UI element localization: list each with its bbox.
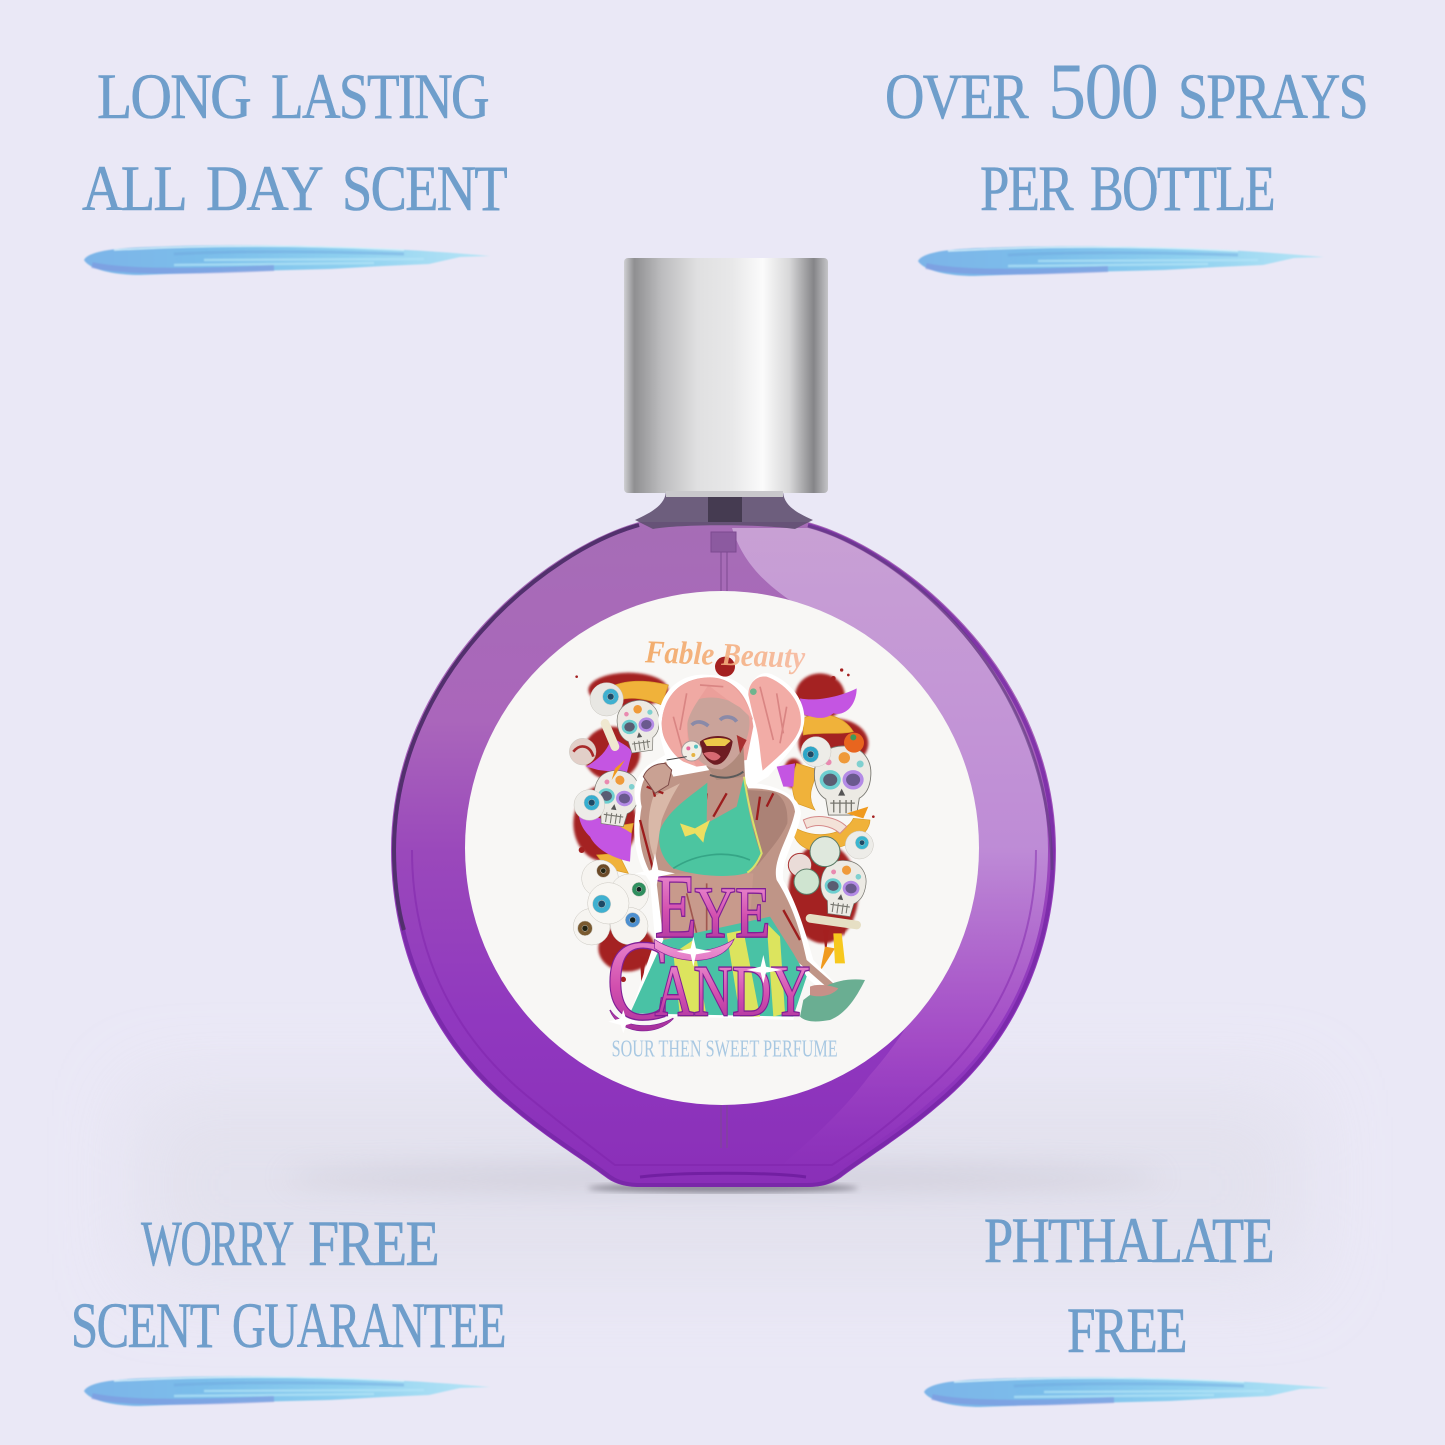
- brush stroke: bottom right: [924, 1377, 1330, 1407]
- blood splatter: [573, 657, 875, 990]
- gummy brains: [788, 837, 840, 894]
- pom pom: [800, 979, 865, 1021]
- feature: long lasting all day scent: LASTING: [271, 61, 488, 133]
- label artwork: [569, 633, 875, 1063]
- sour then sweet perfume: SOUR THEN SWEET PERFUME: [612, 1036, 838, 1063]
- floor shadow: [135, 1090, 1305, 1280]
- feature: over 500 sprays per bottle: BOTTLE: [1090, 153, 1274, 225]
- white cutout: [630, 673, 835, 1020]
- bottle rim: [394, 525, 1053, 1185]
- feature: worry free scent guarantee: FREE: [308, 1208, 438, 1280]
- eyeballs: [569, 683, 873, 945]
- dip tube: [711, 532, 736, 1148]
- eye candy title: [607, 858, 810, 1043]
- feature: phthalate free: [984, 1205, 1273, 1367]
- sparkles: [608, 853, 782, 1033]
- feature: long lasting all day scent: DAY: [206, 153, 323, 225]
- feature: over 500 sprays per bottle: PER: [980, 153, 1074, 225]
- eye candy title: YE: [695, 873, 770, 953]
- feature: long lasting all day scent: ALL: [82, 153, 186, 225]
- perfume bottle: [391, 258, 1056, 1187]
- bottle neck: [635, 490, 813, 529]
- silver cap: [624, 258, 828, 497]
- feature: over 500 sprays per bottle: [885, 48, 1367, 225]
- green top: [659, 777, 761, 876]
- eye candy title: E: [655, 858, 697, 957]
- feature: phthalate free: PHTHALATE: [984, 1205, 1273, 1277]
- neck and face: [705, 743, 745, 780]
- blood streaks: [640, 770, 800, 940]
- striped skirt: [630, 917, 807, 1017]
- feature: worry free scent guarantee: GUARANTEE: [232, 1290, 505, 1362]
- feature: over 500 sprays per bottle: 500: [1048, 48, 1157, 136]
- eye candy title: ANDY: [655, 951, 810, 1031]
- lollipop and hand: [682, 741, 702, 761]
- feature: over 500 sprays per bottle: SPRAYS: [1178, 61, 1367, 133]
- feature: long lasting all day scent: [82, 61, 507, 225]
- feature: long lasting all day scent: LONG: [97, 61, 250, 133]
- title swashes: [610, 940, 733, 1031]
- brush stroke: bottom left: [84, 1376, 490, 1406]
- glass highlight right: [732, 528, 1048, 1167]
- fable beauty brand: Fable Beauty: [644, 633, 807, 675]
- yellow bow: [680, 820, 710, 843]
- feature: worry free scent guarantee: SCENT: [71, 1290, 219, 1362]
- choker: [710, 772, 743, 778]
- brush stroke: top right: [918, 246, 1324, 276]
- girl figure: [630, 673, 865, 1021]
- glass body: [391, 522, 1056, 1187]
- feature: phthalate free: FREE: [1067, 1295, 1186, 1367]
- round label: [465, 591, 979, 1105]
- sugar skulls: [590, 698, 871, 918]
- feature: worry free scent guarantee: [71, 1208, 505, 1362]
- purple bat gummies: [578, 688, 857, 862]
- feature: long lasting all day scent: SCENT: [342, 153, 507, 225]
- brush stroke: top left: [84, 245, 490, 275]
- feature: over 500 sprays per bottle: OVER: [885, 61, 1029, 133]
- arm and torso skin: [640, 762, 833, 990]
- dark rim upper left: [394, 525, 639, 930]
- bones, candy corn, pumpkin: [605, 723, 868, 972]
- feature: worry free scent guarantee: WORRY: [141, 1208, 294, 1280]
- pink hair: [662, 677, 753, 767]
- eye candy title: C: [607, 917, 670, 1043]
- orange gummy candies: [597, 681, 870, 873]
- midriff: [663, 873, 770, 943]
- inner rim lines: [412, 850, 1036, 1165]
- back hair: [662, 677, 753, 767]
